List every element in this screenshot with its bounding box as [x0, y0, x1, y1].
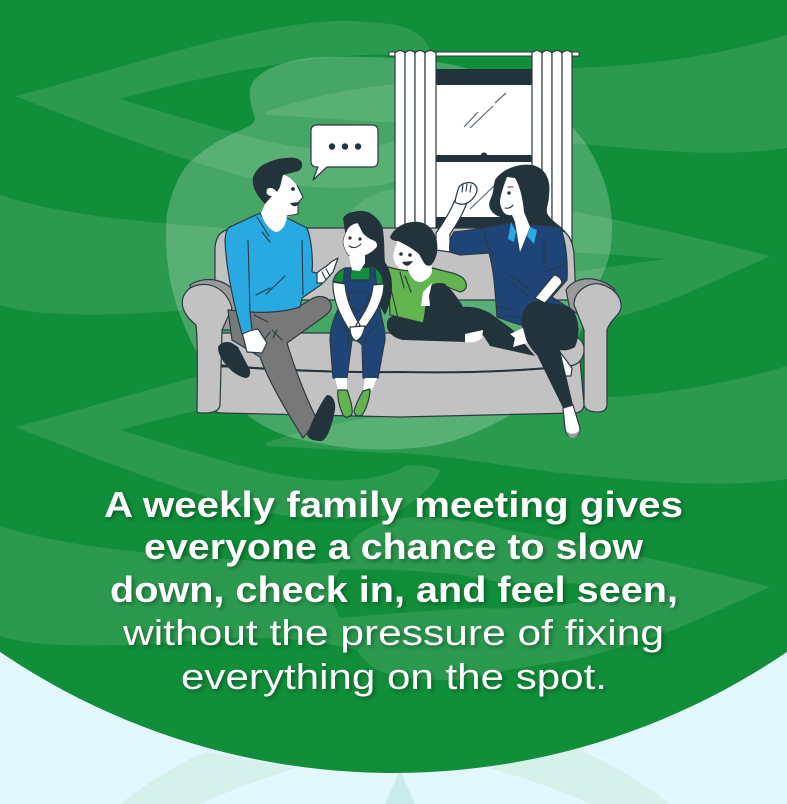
boy face: [393, 236, 432, 282]
girl neck: [349, 255, 365, 271]
girl arms: [333, 282, 384, 334]
woman shoe: [563, 405, 580, 437]
speech bubble: [311, 125, 378, 180]
sofa base: [212, 360, 584, 417]
pale swirl at the bottom: [120, 748, 670, 804]
man sweater: [225, 213, 322, 334]
girl shoes: [338, 390, 352, 417]
girl shirt: [333, 267, 383, 286]
caption text: [104, 484, 683, 697]
window: [436, 69, 532, 229]
caption text: everyone a chance to slow: [144, 526, 644, 567]
girl hair: [343, 211, 392, 315]
girl: [330, 211, 392, 417]
right arm: [566, 279, 621, 412]
boy sock: [465, 330, 483, 342]
boy: [387, 222, 535, 356]
left arm: [182, 280, 240, 413]
right curtain: [532, 50, 572, 245]
sofa back: [215, 228, 576, 300]
man far shoe: [218, 342, 250, 378]
back foot: [556, 352, 572, 376]
woman raised arm: [436, 200, 467, 252]
caption text: everything on the spot.: [181, 656, 607, 697]
woman hair: [489, 165, 566, 232]
girl overalls: [330, 268, 385, 378]
man hand on knee: [242, 329, 267, 353]
woman neck and face: [500, 177, 530, 252]
woman fist: [455, 183, 477, 204]
girl socks: [335, 378, 377, 390]
girl face: [343, 223, 377, 258]
man near shoe: [307, 395, 335, 441]
man neck and face: [261, 174, 303, 232]
illustration: family on sofa: [182, 50, 621, 441]
woman: [436, 165, 580, 438]
boy shirt: [388, 267, 466, 323]
left curtain: [395, 50, 436, 240]
man pointing hand: [317, 258, 338, 283]
woman legs: [522, 301, 579, 408]
boy hand: [421, 283, 432, 306]
woman sweater: [450, 223, 575, 330]
woman forearm: [535, 275, 562, 303]
man: [218, 158, 338, 441]
woman hand on knee: [510, 328, 527, 347]
caption text: A weekly family meeting gives: [104, 484, 683, 525]
curtain rod: [389, 52, 579, 56]
caption text: without the pressure of fixing: [122, 612, 664, 653]
sofa: [182, 228, 621, 417]
woman collar: [508, 222, 537, 244]
man trousers: [228, 296, 331, 438]
seat cushion: [213, 333, 584, 372]
girl hands: [350, 326, 365, 341]
boy legs: [387, 283, 535, 356]
boy hair: [390, 222, 437, 266]
man hair: [253, 158, 302, 204]
caption text: down, check in, and feel seen,: [110, 569, 678, 610]
